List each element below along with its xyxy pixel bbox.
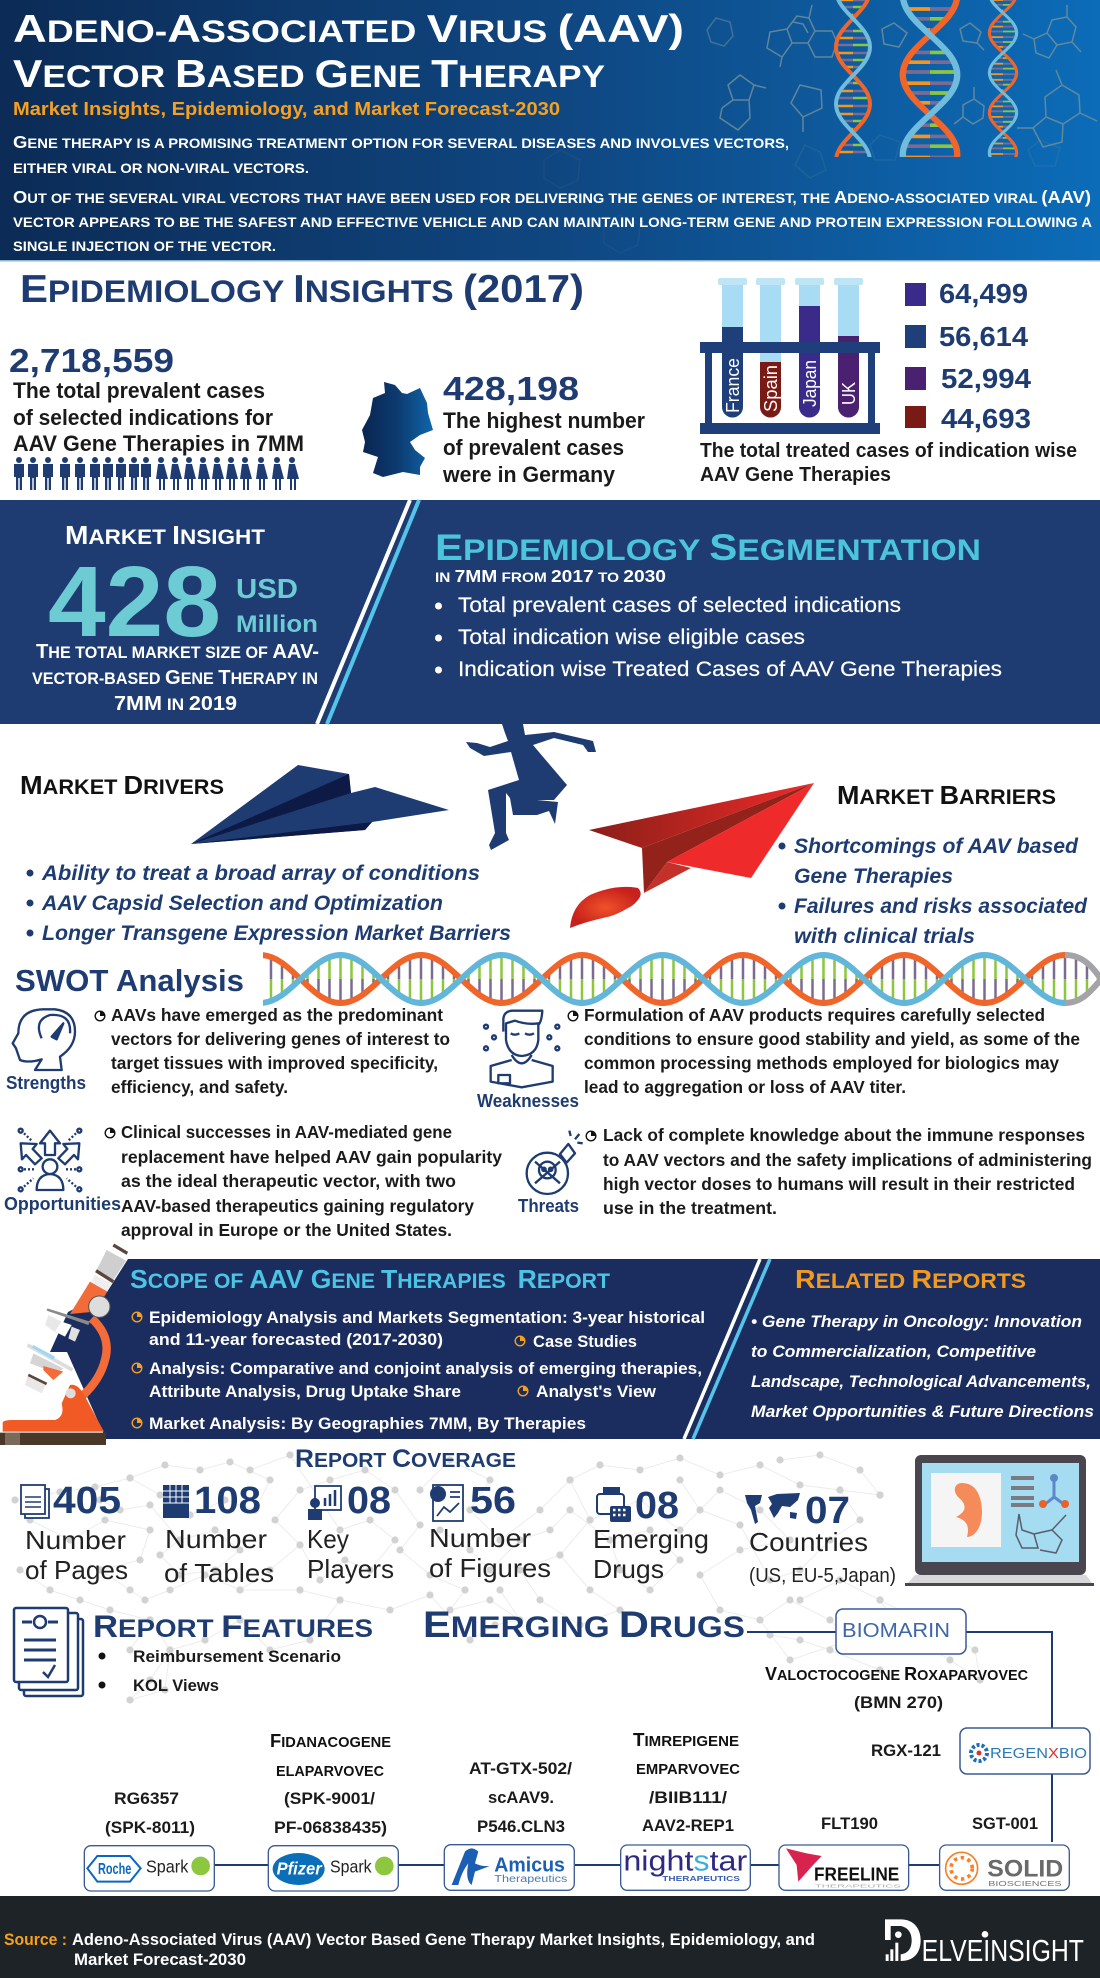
stat: tables: [163, 1480, 274, 1588]
heading: SWOT analysis: SWOT Analysis: [15, 963, 244, 998]
stat: pages: of Pages: [25, 1555, 128, 1585]
label: AT-GTX-502: [469, 1759, 572, 1836]
related reports: RELATED REPORTS: [795, 1264, 1026, 1294]
logo box: Pfizer and Spark: Pfizer: [277, 1859, 323, 1879]
label: RG6357: (SPK-8011): [105, 1818, 195, 1837]
test tube: Japan: Japan: [800, 360, 820, 407]
heading: emerging drugs: EMERGING DRUGS: [423, 1603, 745, 1645]
logo box: Roche and Spark: Roche: [98, 1861, 131, 1878]
label: valoctocogene: VALOCTOCOGENE ROXAPARVOVEC: [765, 1663, 1028, 1684]
scope of report: SCOPE OF AAV GENE THERAPIES REPORT: [130, 1264, 610, 1294]
label: timrepigene: AAV2-REP1: [642, 1816, 734, 1835]
stat: key players: 08: [347, 1480, 391, 1522]
label: RG6357: RG6357: [114, 1789, 179, 1808]
stat: pages: [21, 1480, 128, 1585]
legend: treated cases values: 44,693: [941, 403, 1031, 434]
related reports: Landscape, Technological Advancements,: [751, 1372, 1091, 1391]
test tube: France: [718, 278, 747, 418]
panel: report features: REPORT FEATURES: [93, 1609, 373, 1644]
logo box: Solid Biosciences: [940, 1845, 1069, 1890]
related reports: to Commercialization, Competitive: [751, 1342, 1036, 1361]
label: RG6357: [105, 1789, 195, 1837]
intro paragraph two: SINGLE INJECTION OF THE VECTOR.: [13, 238, 276, 254]
panel: report coverage: [21, 1445, 896, 1588]
icon: document stack: [14, 1608, 83, 1696]
panel: strengths: vectors for delivering genes of interest to: [111, 1029, 450, 1049]
intro paragraph two: OUT OF THE SEVERAL VIRAL VECTORS THAT HAVE BEEN USED FOR DELIVERING THE GENES OF INTEREST, THE ADENO-ASSOCIATED VIRAL (AAV): [13, 187, 1091, 207]
panel: footer: [0, 1896, 1100, 1978]
stat: emerging drugs: 08: [635, 1485, 679, 1527]
label: fidanacogene: [270, 1730, 391, 1837]
logo box: Freeline: FREELINE: [814, 1864, 899, 1885]
test tube: Japan: [795, 278, 824, 418]
label: timrepigene: [633, 1729, 740, 1835]
logo box: Nightstar: nightstar: [623, 1846, 748, 1878]
panel: threats: to AAV vectors and the safety implications of administering: [603, 1150, 1092, 1170]
panel: market drivers: AAV Capsid Selection and Optimization: [41, 892, 443, 915]
panel: strengths: efficiency, and safety.: [111, 1077, 288, 1097]
stat: key players: [307, 1480, 394, 1584]
panel: report features: KOL Views: [133, 1676, 219, 1695]
legend: treated cases values: 56,614: [939, 321, 1028, 352]
stat: key players: Key: [307, 1524, 349, 1554]
related reports: • Gene Therapy in Oncology: Innovation: [751, 1312, 1082, 1331]
panel: Germany: of prevalent cases: [443, 435, 624, 460]
intro paragraph one: [13, 132, 789, 176]
stat: emerging drugs: [593, 1485, 709, 1584]
epidemiology segmentation: EPIDEMIOLOGY SEGMENTATION: [435, 526, 981, 568]
epidemiology segmentation: Total indication wise eligible cases: [458, 625, 805, 649]
panel: threats: Threats: [518, 1196, 579, 1216]
intro paragraph one: EITHER VIRAL OR NON-VIRAL VECTORS.: [13, 160, 309, 176]
panel: Germany: were in Germany: [442, 462, 616, 487]
label: fidanacogene: PF-06838435): [274, 1818, 387, 1837]
label: SGT-001: SGT-001: [972, 1814, 1038, 1833]
test tube: UK: UK: [839, 382, 859, 405]
stat: tables: of Tables: [164, 1558, 274, 1588]
logo box: Roche and Spark: Spark: [146, 1857, 189, 1877]
stat: emerging drugs: Drugs: [593, 1554, 664, 1584]
test tube: Spain: Spain: [761, 365, 781, 412]
market insight: VECTOR-BASED GENE THERAPY IN: [32, 666, 318, 689]
panel: market barriers: Failures and risks associated: [794, 895, 1088, 918]
panel: threats: [518, 1125, 1092, 1218]
title: ADENO- ASSOCIATED VIRUS (AAV): [13, 7, 684, 51]
intro paragraph two: VECTOR APPEARS TO BE THE SAFEST AND EFFECTIVE VEHICLE AND CAN MAINTAIN LONG-TERM GENE AND PROTEIN EXPRESSION FOLLOWING A: [13, 214, 1092, 230]
label: valoctocogene: [765, 1663, 1028, 1712]
stat: tables: 108: [194, 1480, 261, 1522]
panel: weaknesses: lead to aggregation or loss of AAV titer.: [584, 1077, 906, 1097]
label: fidanacogene: ELAPARVOVEC: [276, 1763, 384, 1780]
icon: people row: [14, 457, 299, 490]
market insight: THE TOTAL MARKET SIZE OF AAV-: [36, 640, 319, 663]
logo box: Amicus: [444, 1845, 574, 1890]
label: fidanacogene: FIDANACOGENE: [270, 1730, 391, 1751]
stat: key players: Players: [307, 1554, 394, 1584]
stat: figures: of Figures: [429, 1553, 551, 1583]
icon: head with gauge: [13, 1009, 75, 1070]
scope of report: Analysis: Comparative and conjoint analysis of emerging therapies,: [149, 1359, 702, 1378]
test tube: UK: [834, 278, 863, 418]
icon: navy paper plane: [191, 765, 449, 844]
rocket flame: [570, 887, 641, 928]
stat: pages: 405: [53, 1480, 121, 1522]
panel: report coverage: REPORT COVERAGE: [295, 1445, 516, 1473]
label: timrepigene: /BIIB111/: [649, 1788, 727, 1807]
panel: scope and related reports band: [50, 1259, 1100, 1439]
logo box: Pfizer and Spark: Spark: [330, 1857, 372, 1877]
heading: epidemiology insights: EPIDEMIOLOGY INSIGHTS (2017): [20, 267, 584, 311]
stat: tables: Number: [165, 1524, 267, 1554]
panel: report features: Reimbursement Scenario: [133, 1647, 341, 1666]
panel: opportunities: as the ideal therapeutic vector, with two: [121, 1171, 456, 1191]
source text: Adeno-Associated Virus (AAV) Vector Based Gene Therapy Market Insights, Epidemiology, and: [72, 1930, 815, 1949]
icon: map of Germany: [362, 382, 433, 477]
caption: [700, 440, 1077, 486]
subtitle: Market Insights, Epidemiology, and Market Forecast-2030: [13, 99, 560, 119]
test tube: Spain: [756, 278, 785, 418]
icon: horizontal DNA helix: [146, 955, 1100, 1003]
logo box: BioMarin: BIOMARIN: [842, 1620, 950, 1642]
panel: Germany: [362, 370, 645, 487]
title: VECTOR BASED GENE THERAPY: [13, 52, 605, 96]
panel: total prevalent cases: The total prevalent cases: [13, 378, 265, 403]
panel: header: [0, 0, 1100, 262]
panel: strengths: Strengths: [6, 1073, 86, 1093]
panel: market drivers: Ability to treat a broad array of conditions: [41, 862, 480, 885]
scope of report: Case Studies: [533, 1332, 637, 1351]
epidemiology segmentation: Indication wise Treated Cases of AAV Gene Therapies: [458, 657, 1002, 681]
chart: test tubes treated cases: [700, 278, 1077, 486]
logo box: Pfizer and Spark: [268, 1846, 398, 1891]
panel: opportunities: Opportunities: [4, 1194, 121, 1214]
panel: Germany: 428,198: [443, 370, 579, 407]
label: timrepigene: TIMREPIGENE: [633, 1729, 739, 1750]
logo box: Freeline: THERAPEUTICS: [815, 1884, 901, 1889]
panel: Germany: The highest number: [443, 408, 645, 433]
connector lines: [214, 1632, 1052, 1865]
logo box: Freeline: [779, 1845, 909, 1890]
caption: The total treated cases of indication wise: [700, 440, 1077, 462]
panel: market barriers: MARKET BARRIERS: [837, 780, 1056, 810]
scope of report: Market Analysis: By Geographies 7MM, By Therapies: [149, 1414, 586, 1433]
related reports: Market Opportunities & Future Directions: [751, 1402, 1094, 1421]
intro paragraph two: [13, 187, 1092, 254]
source text: Source :: [4, 1930, 67, 1949]
panel: report features: [14, 1608, 373, 1696]
stat: figures: [429, 1480, 551, 1583]
logo box: Nightstar: [621, 1845, 750, 1890]
panel: total prevalent cases: AAV Gene Therapies in 7MM: [13, 431, 304, 456]
panel: market drivers: [20, 770, 511, 945]
icon: person: [484, 1011, 559, 1087]
icon: microscope: [0, 1245, 127, 1445]
test tube: France: France: [723, 358, 743, 413]
label: AT-GTX-502: AT-GTX-502/: [469, 1759, 572, 1778]
source text: Market Forecast-2030: [74, 1950, 246, 1969]
logo box: Roche and Spark: [84, 1846, 214, 1891]
stat: pages: Number: [25, 1525, 126, 1555]
panel: strengths: target tissues with improved specificity,: [111, 1053, 438, 1073]
stat: countries: 07: [805, 1490, 850, 1532]
stat: countries: (US, EU-5,Japan): [749, 1565, 896, 1587]
panel: opportunities: replacement have helped AAV gain popularity: [121, 1147, 502, 1167]
panel: strengths: [6, 1005, 450, 1097]
scope of report: and 11-year forecasted (2017-2030): [149, 1330, 443, 1349]
scope of report: Attribute Analysis, Drug Uptake Share: [149, 1382, 461, 1401]
icon: jumping man: [466, 724, 596, 850]
stat: emerging drugs: Emerging: [593, 1524, 709, 1554]
label: valoctocogene: (BMN 270): [854, 1693, 943, 1712]
logo box: Amicus: Therapeutics: [494, 1874, 567, 1885]
panel: market insight and segmentation band: [0, 500, 1100, 724]
scope of report: [130, 1264, 705, 1433]
panel: threats: use in the treatment.: [603, 1198, 777, 1218]
legend: treated cases values: [905, 278, 1031, 434]
epidemiology segmentation: Total prevalent cases of selected indications: [458, 593, 901, 617]
panel: weaknesses: conditions to ensure good stability and yield, as some of the: [584, 1029, 1080, 1049]
source text: [4, 1930, 815, 1969]
panel: weaknesses: Formulation of AAV products requires carefully selected: [584, 1005, 1045, 1025]
network background: [15, 1455, 980, 1700]
panel: market barriers: Shortcomings of AAV based: [794, 835, 1079, 858]
legend: treated cases values: 52,994: [941, 363, 1031, 394]
panel: threats: Lack of complete knowledge about the immune responses: [603, 1125, 1085, 1145]
molecule decorations: [544, 5, 1097, 253]
title: [13, 7, 684, 96]
related reports: [751, 1264, 1094, 1421]
logo box: Regenxbio: REGEN XBIO: [990, 1745, 1087, 1762]
market insight: Million: [236, 611, 318, 638]
stat: figures: Number: [429, 1523, 531, 1553]
logo box: Solid Biosciences: BIOSCIENCES: [988, 1879, 1062, 1888]
icon: DNA strands: [834, 0, 1018, 157]
market insight: USD: [236, 573, 298, 604]
icon: person with arrows: [19, 1129, 81, 1191]
scope of report: Analyst's View: [536, 1382, 657, 1401]
legend: treated cases values: 64,499: [939, 278, 1028, 309]
panel: opportunities: Clinical successes in AAV-mediated gene: [121, 1122, 452, 1142]
panel: market drivers: Longer Transgene Expression Market Barriers: [42, 922, 511, 945]
logo box: Solid Biosciences: SOLID: [987, 1856, 1063, 1883]
market insight: 7MM IN 2019: [114, 692, 237, 715]
stat: figures: 56: [470, 1480, 516, 1522]
logo box: Regenxbio: [960, 1728, 1090, 1774]
panel: opportunities: AAV-based therapeutics gaining regulatory: [121, 1196, 474, 1216]
market insight: 428: [48, 546, 221, 658]
stat: countries: Countries: [749, 1527, 868, 1557]
epidemiology segmentation: [435, 526, 1002, 681]
panel: market barriers: [778, 780, 1088, 948]
tube rack: [700, 342, 880, 434]
label: FLT190: FLT190: [821, 1814, 878, 1833]
logo: DelveInsight: [885, 1919, 1084, 1968]
icon: laptop: [905, 1455, 1094, 1586]
logo box: Nightstar: THERAPEUTICS: [662, 1874, 740, 1883]
panel: weaknesses: Weaknesses: [477, 1091, 579, 1111]
panel: total prevalent cases: of selected indications for: [13, 405, 273, 430]
panel: weaknesses: [477, 1005, 1080, 1111]
panel: market barriers: Gene Therapies: [794, 865, 953, 888]
caption: AAV Gene Therapies: [700, 464, 891, 486]
panel: market drivers: MARKET DRIVERS: [20, 770, 224, 800]
logo box: BioMarin: [836, 1609, 966, 1654]
epidemiology segmentation: IN 7MM FROM 2017 TO 2030: [435, 566, 666, 586]
panel: threats: high vector doses to humans will result in their restricted: [603, 1174, 1075, 1194]
stat: countries: [745, 1490, 896, 1587]
panel: strengths: AAVs have emerged as the predominant: [111, 1005, 443, 1025]
panel: market barriers: with clinical trials: [794, 925, 975, 948]
icon: red paper plane: [570, 783, 814, 928]
scope of report: Epidemiology Analysis and Markets Segmentation: 3-year historical: [149, 1308, 705, 1327]
panel: opportunities: [4, 1122, 502, 1240]
panel: opportunities: approval in Europe or the United States.: [121, 1220, 452, 1240]
market insight: MARKET INSIGHT: [65, 520, 265, 550]
label: AT-GTX-502: scAAV9.: [488, 1788, 554, 1807]
label: fidanacogene: (SPK-9001/: [284, 1789, 375, 1808]
icon: bomb: [527, 1131, 583, 1194]
panel: total prevalent cases: [9, 342, 304, 490]
label: timrepigene: EMPARVOVEC: [636, 1761, 740, 1778]
intro paragraph one: GENE THERAPY IS A PROMISING TREATMENT OPTION FOR SEVERAL DISEASES AND INVOLVES VECTORS,: [13, 132, 789, 152]
panel: total prevalent cases: 2,718,559: [9, 342, 174, 379]
market insight: [32, 520, 319, 715]
label: AT-GTX-502: P546.CLN3: [477, 1817, 565, 1836]
panel: weaknesses: common processing methods employed for biologics may: [584, 1053, 1059, 1073]
logo box: Amicus: Amicus: [494, 1853, 565, 1876]
label: RGX-121: RGX-121: [871, 1741, 941, 1760]
